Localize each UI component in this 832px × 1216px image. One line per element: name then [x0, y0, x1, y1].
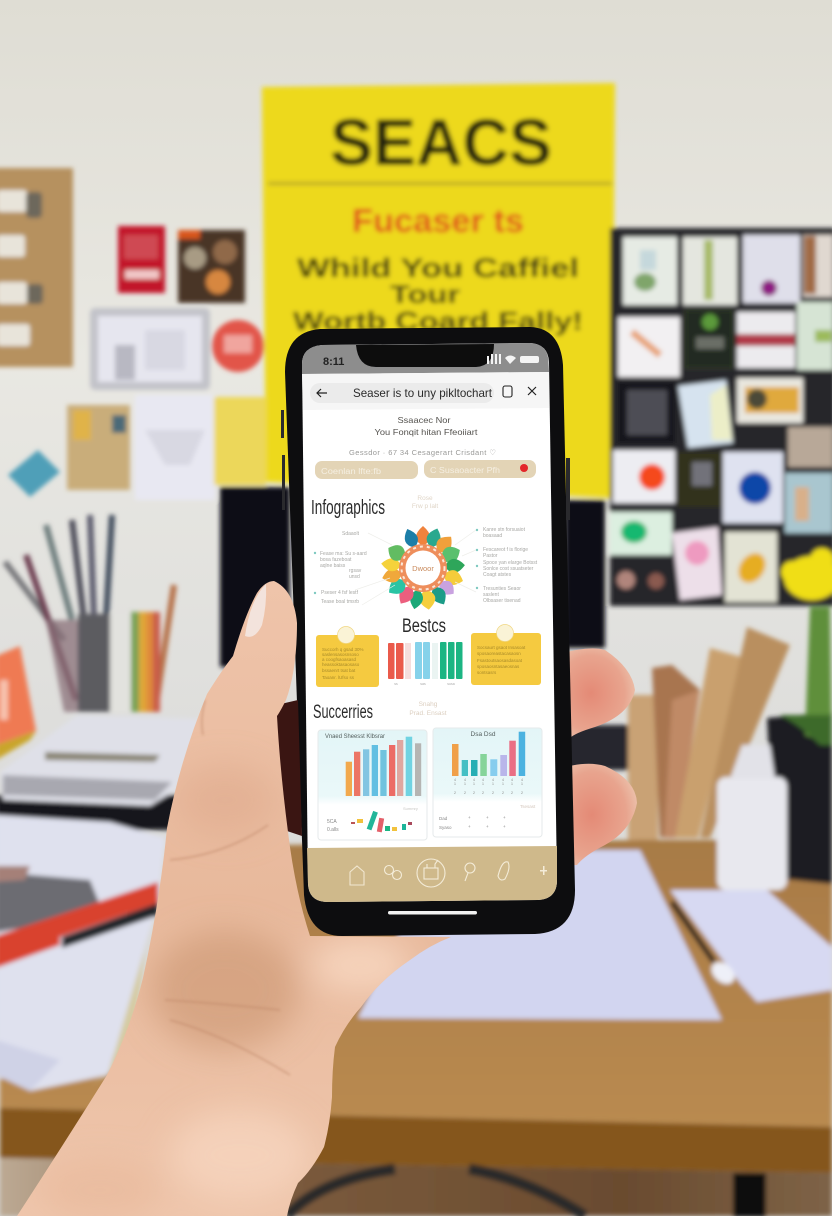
card two axis ticks: 4 [454, 778, 456, 782]
card two axis ticks: 2 [473, 791, 475, 795]
card two axis ticks: 1 [502, 782, 504, 786]
desk [0, 840, 832, 1173]
row 4 cards [613, 450, 832, 533]
browser header [302, 372, 549, 410]
infographics heading: Infographics [311, 497, 385, 519]
back arrow [317, 389, 327, 397]
status icons [487, 354, 539, 364]
poster body text: Tour [390, 281, 460, 309]
cork board [0, 168, 73, 367]
right pill [424, 460, 536, 478]
home indicator [388, 911, 477, 914]
card two table: + [486, 824, 489, 829]
left sunburst labels: aqlne baiss [320, 563, 346, 569]
card two table: Tsesast [520, 804, 536, 809]
right yellow card: sposaosntasaeosnas [477, 664, 520, 669]
card two axis ticks: 4 [511, 778, 513, 782]
card two table: + [468, 824, 471, 829]
left yellow card: a coogfsaoasasd [322, 657, 357, 662]
card two table: + [468, 815, 471, 820]
card two title: Dsa Dsd [471, 731, 496, 738]
white bottle [717, 745, 787, 890]
palm shading [40, 700, 410, 1216]
phone body [285, 327, 575, 936]
address bar [310, 383, 494, 403]
right yellow card: sontsasrs [477, 670, 497, 675]
large white notebook [358, 850, 722, 1020]
card one mini chart [327, 806, 418, 833]
card two bars [452, 732, 525, 776]
palm creases [165, 700, 290, 1075]
card two axis ticks: 4 [473, 778, 475, 782]
small notebook [670, 890, 832, 1002]
address text: Seaser is to uny pikltochart [353, 386, 493, 400]
poster heading: SEACS [330, 105, 552, 179]
pale caption: Frw p lalt [412, 503, 438, 510]
book stack [0, 715, 200, 830]
row 5 cards [610, 512, 777, 602]
centre bar chart: ss [394, 682, 398, 686]
sunburst connector lines [355, 530, 476, 605]
left sunburst labels: unsd [349, 574, 360, 580]
yellow flowers [781, 548, 832, 600]
pale caption [412, 495, 438, 510]
pen on notebook [672, 902, 739, 988]
close icon [528, 387, 536, 395]
card two table [439, 804, 536, 830]
right yellow card: Fsastoutsaosasdasoat [477, 658, 523, 663]
card two axis ticks: 2 [502, 791, 504, 795]
status bar [302, 343, 549, 374]
card two axis ticks: 2 [464, 791, 466, 795]
pale caption two [409, 701, 447, 717]
tan card [67, 405, 130, 490]
right sunburst labels: Spoce yan elarge Botsst [483, 560, 538, 566]
nav dots [540, 866, 547, 875]
dark stand under poster [220, 487, 605, 667]
bestics heading: Bestcs [402, 616, 446, 637]
left yellow card: saslensasosnsoso [322, 652, 359, 657]
card two axis ticks [454, 778, 523, 795]
card two table: + [486, 815, 489, 820]
card two axis ticks: 1 [482, 782, 484, 786]
pale caption two: Snahg [419, 701, 438, 708]
page intro text: Ssaacec Nor [398, 415, 451, 425]
card two table: Dad [439, 816, 448, 821]
dark gap behind fingers [560, 725, 628, 770]
orange box [0, 646, 36, 760]
card two axis ticks: 4 [464, 778, 466, 782]
left sunburst labels: Sdaaolt [342, 531, 360, 537]
sunburst chart [381, 526, 465, 611]
paper pile on desk [0, 815, 165, 1091]
phone [281, 327, 575, 936]
left sunburst labels: rgsav [349, 568, 362, 574]
card two table: + [503, 824, 506, 829]
white sheet [135, 395, 215, 500]
blue card [8, 450, 60, 497]
successes heading: Succerries [313, 702, 373, 723]
centre bar chart: sas [420, 682, 426, 686]
left pill: Coenlan lfte:fb [321, 467, 382, 476]
poster body text: Wortb Coard Fally! [293, 306, 583, 336]
left yellow card: bssaenrt tsat bat [322, 668, 356, 673]
card two axis ticks: 2 [482, 791, 484, 795]
card one bars [346, 737, 421, 796]
centre bar chart [388, 642, 462, 686]
nav icons [350, 859, 509, 887]
red ruler [0, 882, 158, 968]
page intro text [374, 415, 478, 437]
right sunburst labels: Sonlce cost ssuatseter [483, 566, 534, 572]
card two axis ticks: 1 [521, 782, 523, 786]
red card [118, 226, 165, 293]
row 3 cards [618, 378, 832, 467]
framed note [90, 308, 210, 390]
left sunburst labels: Pseser 4 fsf lestf [321, 590, 359, 596]
right sunburst labels [476, 527, 538, 604]
card two axis ticks: 2 [521, 791, 523, 795]
left sunburst labels [314, 531, 367, 605]
red sticker [212, 320, 264, 372]
card two axis ticks: 2 [511, 791, 513, 795]
right sunburst labels: Kanre stn forsuaiot [483, 527, 526, 533]
phone screen [302, 343, 557, 902]
side buttons [281, 410, 570, 520]
card two table: + [503, 815, 506, 820]
right sunburst labels: boasaad [483, 533, 502, 539]
right yellow card: Socsaurt gsaot Insasoat [477, 645, 526, 650]
left sunburst labels: bosa fazeboat [320, 557, 352, 563]
card two axis ticks: 1 [464, 782, 466, 786]
books behind phone [628, 627, 790, 840]
pen holder [5, 515, 174, 712]
card one mini chart: 5CA [327, 819, 337, 825]
sunburst chart: Dwoor [412, 564, 434, 573]
card two axis ticks: 1 [454, 782, 456, 786]
floor and table legs [0, 1158, 832, 1216]
card two axis ticks: 1 [473, 782, 475, 786]
black pen [62, 903, 158, 948]
card two axis ticks: 1 [492, 782, 494, 786]
share icon [503, 386, 512, 397]
row 1 cards [623, 235, 832, 305]
right sunburst labels: Tresunties Seaor [483, 586, 521, 592]
card two axis ticks: 4 [502, 778, 504, 782]
page intro text: You Fonqit hitan Ffeoiiart [374, 427, 478, 437]
right fingers behind phone [555, 648, 637, 866]
left yellow card: Succorh q gsad 30% [322, 647, 364, 652]
card two axis ticks: 4 [521, 778, 523, 782]
bottom navigation [307, 846, 557, 902]
row 2 cards [618, 302, 832, 377]
lower finger [555, 764, 637, 866]
chart card one [318, 730, 427, 840]
shadow between thumb and phone [272, 700, 302, 836]
card two axis ticks: 4 [492, 778, 494, 782]
right pill: C Susaoacter Pfh [430, 466, 500, 475]
card one title: Vnaed Sheesst Klbsrar [325, 733, 386, 740]
card two axis ticks: 4 [482, 778, 484, 782]
right yellow card: sposaoreastacasaosn [477, 651, 521, 656]
card two axis ticks: 2 [454, 791, 456, 795]
left yellow card: heassoktasaosaso [322, 662, 360, 667]
left sunburst labels: Tease boal tmsrb [321, 599, 359, 605]
card one mini chart: Summry [403, 806, 418, 811]
right sunburst labels: Olbsaser tisenad [483, 598, 521, 604]
right yellow card [471, 624, 541, 685]
card one mini chart: 0.alls [327, 827, 339, 833]
yellow note [214, 397, 266, 485]
right sunburst labels: saslent [483, 592, 499, 598]
poster board [610, 228, 832, 606]
right sunburst labels: Fescareot f is florige [483, 547, 528, 553]
pale caption: Rose [417, 495, 433, 502]
centre bar chart: susa [447, 682, 455, 686]
left sunburst labels: Fease ma: Su s-aard [320, 551, 367, 557]
hand and thumb [17, 581, 451, 1216]
plant pot [767, 607, 832, 884]
pale caption two: Prad. Ensast [409, 710, 447, 717]
food photo [178, 230, 245, 303]
thumbnail [245, 584, 266, 637]
meta row: Gessdor · 67 34 Cesagerart Crisdant ♡ [349, 448, 496, 457]
left yellow card: Taoanr. lUfso ss [322, 675, 355, 680]
left yellow card [316, 626, 379, 687]
chart card two [433, 728, 542, 837]
poster subheading: Fucaser ts [352, 202, 524, 239]
card two table: Syaso [439, 825, 452, 830]
status time: 8:11 [323, 356, 344, 368]
left pill [315, 461, 418, 479]
poster body text: Whild You Caffiel [297, 253, 579, 283]
card two axis ticks: 1 [511, 782, 513, 786]
right sunburst labels: Pastor [483, 553, 498, 559]
right sunburst labels: Coagt atstes [483, 572, 512, 578]
upper finger [555, 648, 635, 738]
printed image on paper [0, 872, 100, 932]
card two axis ticks: 2 [492, 791, 494, 795]
yellow poster [262, 83, 615, 498]
poster body text [293, 253, 583, 336]
